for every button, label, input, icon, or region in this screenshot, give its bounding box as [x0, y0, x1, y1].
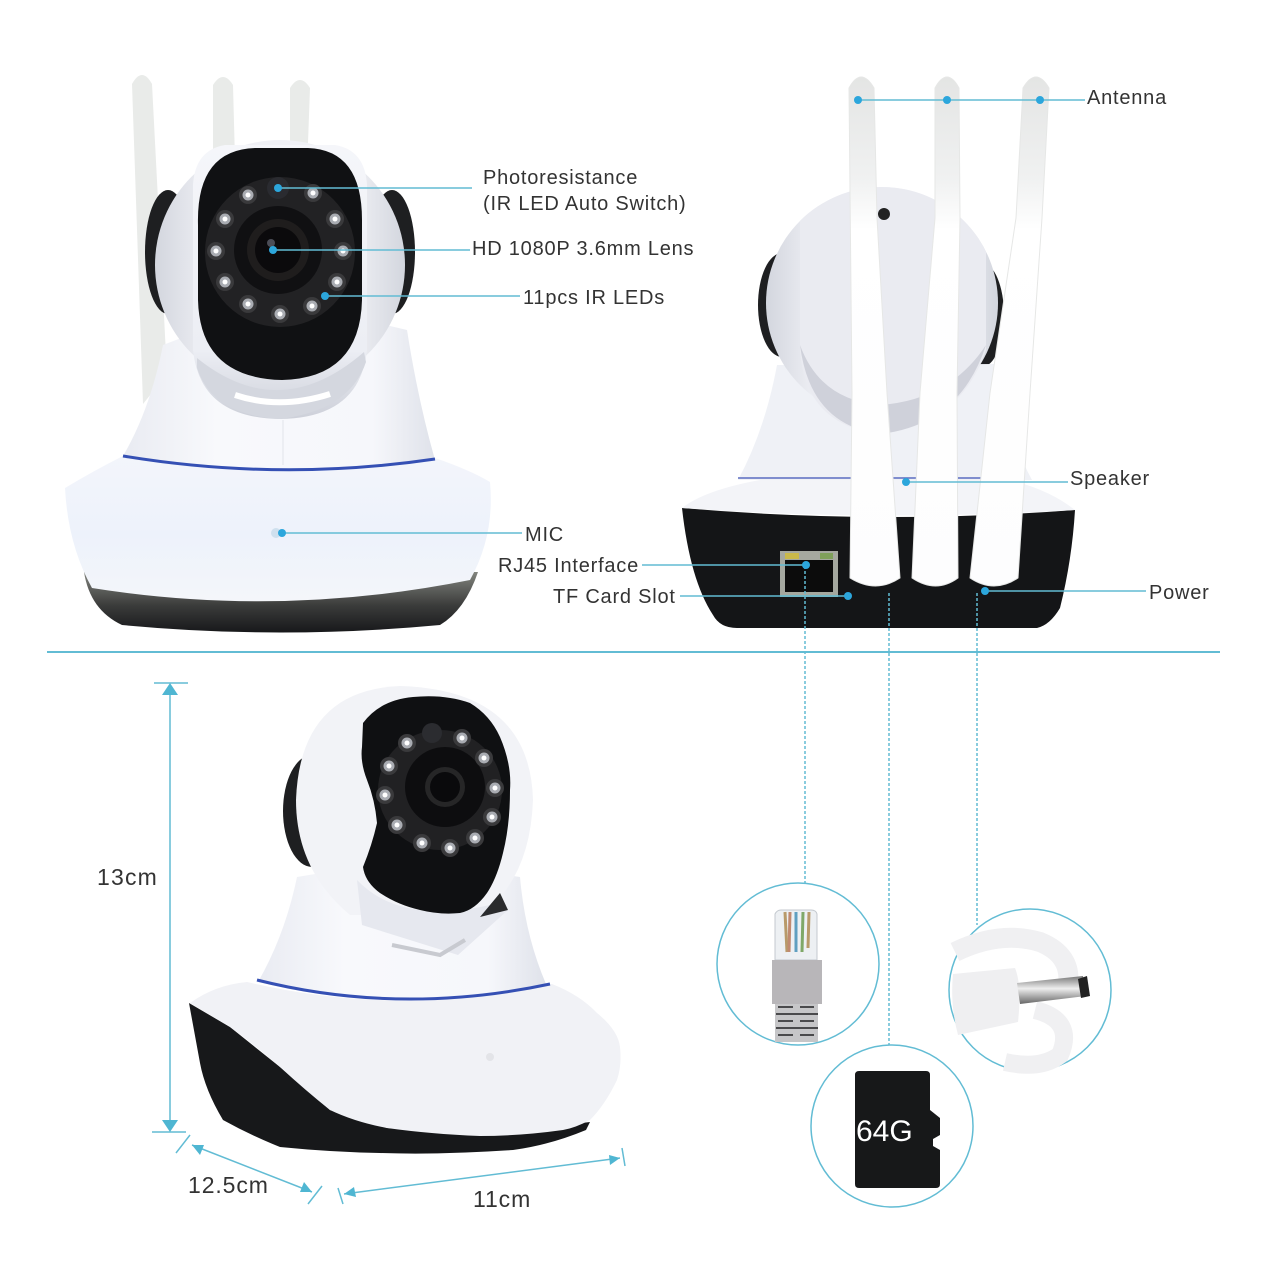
icon: RJ45 plug: [772, 910, 822, 1042]
angled head: [296, 686, 533, 915]
front white base: [65, 456, 491, 601]
rear dark body: [682, 508, 1075, 628]
angled black lower body: [189, 1003, 590, 1154]
labels: MIC: [525, 524, 564, 546]
labels: Antenna: [1087, 87, 1167, 109]
front dark bottom: [84, 572, 478, 632]
labels: 12.5cm: [188, 1172, 269, 1198]
side ear: [283, 755, 341, 867]
icon: 64G TF card: [855, 1071, 940, 1188]
angled stand: [258, 860, 546, 999]
front head: [155, 140, 405, 390]
antennas behind front camera: [132, 75, 310, 404]
angled white base: [190, 982, 621, 1136]
labels: Photoresistance: [483, 167, 638, 189]
front black face: [198, 148, 362, 380]
rear stand: [738, 364, 1032, 480]
labels: 13cm: [97, 864, 158, 890]
RJ45 port: [780, 551, 838, 597]
icon: power plug: [952, 938, 1090, 1065]
three antennas: [849, 77, 1049, 586]
icon: 11 IR LEDs: [207, 184, 352, 323]
blue ring: [123, 456, 435, 470]
angled view LEDs: [376, 729, 504, 857]
camera: angled view: [189, 686, 621, 1154]
front side ears: [145, 190, 415, 314]
rear head: [766, 187, 998, 419]
labels: Power: [1149, 582, 1210, 604]
camera: rear view: [682, 77, 1075, 628]
labels: 11pcs IR LEDs: [523, 287, 665, 309]
labels: [97, 87, 1210, 1212]
angled black face: [362, 696, 510, 914]
labels: Speaker: [1070, 468, 1150, 490]
blue ring: [257, 980, 550, 999]
labels: (IR LED Auto Switch): [483, 193, 686, 215]
labels: TF Card Slot: [553, 586, 676, 608]
front stand: [123, 300, 435, 480]
rear ears: [758, 253, 1004, 367]
labels: 11cm: [473, 1186, 531, 1212]
rear white base: [682, 480, 1075, 516]
labels: HD 1080P 3.6mm Lens: [472, 238, 694, 260]
leader dots: [269, 96, 1044, 600]
camera: front view: [65, 75, 491, 632]
icon: 64G TF card: 64G: [856, 1115, 913, 1148]
dividers and leader lines: [47, 100, 1220, 1207]
labels: RJ45 Interface: [498, 555, 639, 577]
front lens cradle: [193, 145, 367, 419]
